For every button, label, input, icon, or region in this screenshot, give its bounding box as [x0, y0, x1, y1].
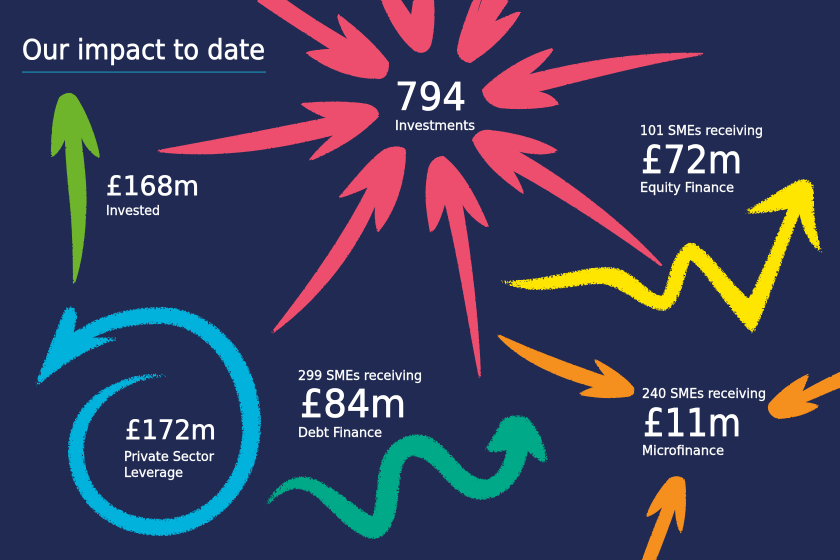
stat: 794 investments	[395, 75, 475, 134]
arrow: pink from below	[427, 157, 488, 378]
arrow: orange from right	[769, 373, 840, 418]
arrow: orange from below	[643, 477, 685, 560]
stat: 72m equity finance	[640, 123, 763, 196]
arrows: pink converging on investments	[158, 0, 703, 378]
arrow: pink from right	[483, 49, 703, 108]
arrow: orange from upper left	[498, 335, 633, 397]
stat: 11m microfinance: 240 SMEs receiving	[642, 386, 766, 402]
arrow: pink from top right	[458, 0, 520, 62]
stat: 72m equity finance: 101 SMEs receiving	[640, 123, 763, 139]
stat: 84m debt finance	[298, 368, 422, 441]
stat: 11m microfinance	[642, 386, 766, 459]
stat: 84m debt finance: Debt Finance	[298, 426, 382, 441]
arrow: cyan spiral	[35, 307, 260, 535]
arrows: orange converging on microfinance	[498, 335, 840, 560]
stat: 168m invested	[106, 171, 199, 219]
arrow: pink from lower right	[473, 131, 662, 266]
stat: 72m equity finance: Equity Finance	[640, 181, 734, 196]
stat: 11m microfinance: Microfinance	[642, 444, 724, 459]
stat: 794 investments: Investments	[395, 119, 475, 134]
stat: 11m microfinance: £11m	[643, 401, 741, 445]
arrow: pink from left	[158, 103, 378, 160]
stat: 72m equity finance: £72m	[641, 138, 742, 182]
arrow: pink from top centre	[382, 0, 434, 52]
arrow: yellow zigzag	[500, 180, 822, 333]
stat: 172m private sector leverage	[124, 415, 216, 481]
arrow: green upward	[52, 94, 99, 283]
stat: 172m private sector leverage: Private Sector	[124, 450, 215, 465]
stat: 172m private sector leverage: Leverage	[124, 466, 183, 481]
stat: 84m debt finance: 299 SMEs receiving	[298, 368, 422, 384]
arrow: pink from top left	[257, 0, 388, 78]
stat: 794 investments: 794	[395, 75, 466, 119]
stat: 168m invested: £168m	[106, 171, 199, 202]
arrow: pink from lower left	[272, 148, 405, 333]
arrow: teal wave	[265, 416, 547, 538]
stat: 84m debt finance: £84m	[300, 382, 406, 426]
stat: 172m private sector leverage: £172m	[125, 415, 216, 446]
title: Our impact to date	[22, 34, 265, 66]
stat: 168m invested: Invested	[106, 204, 160, 219]
